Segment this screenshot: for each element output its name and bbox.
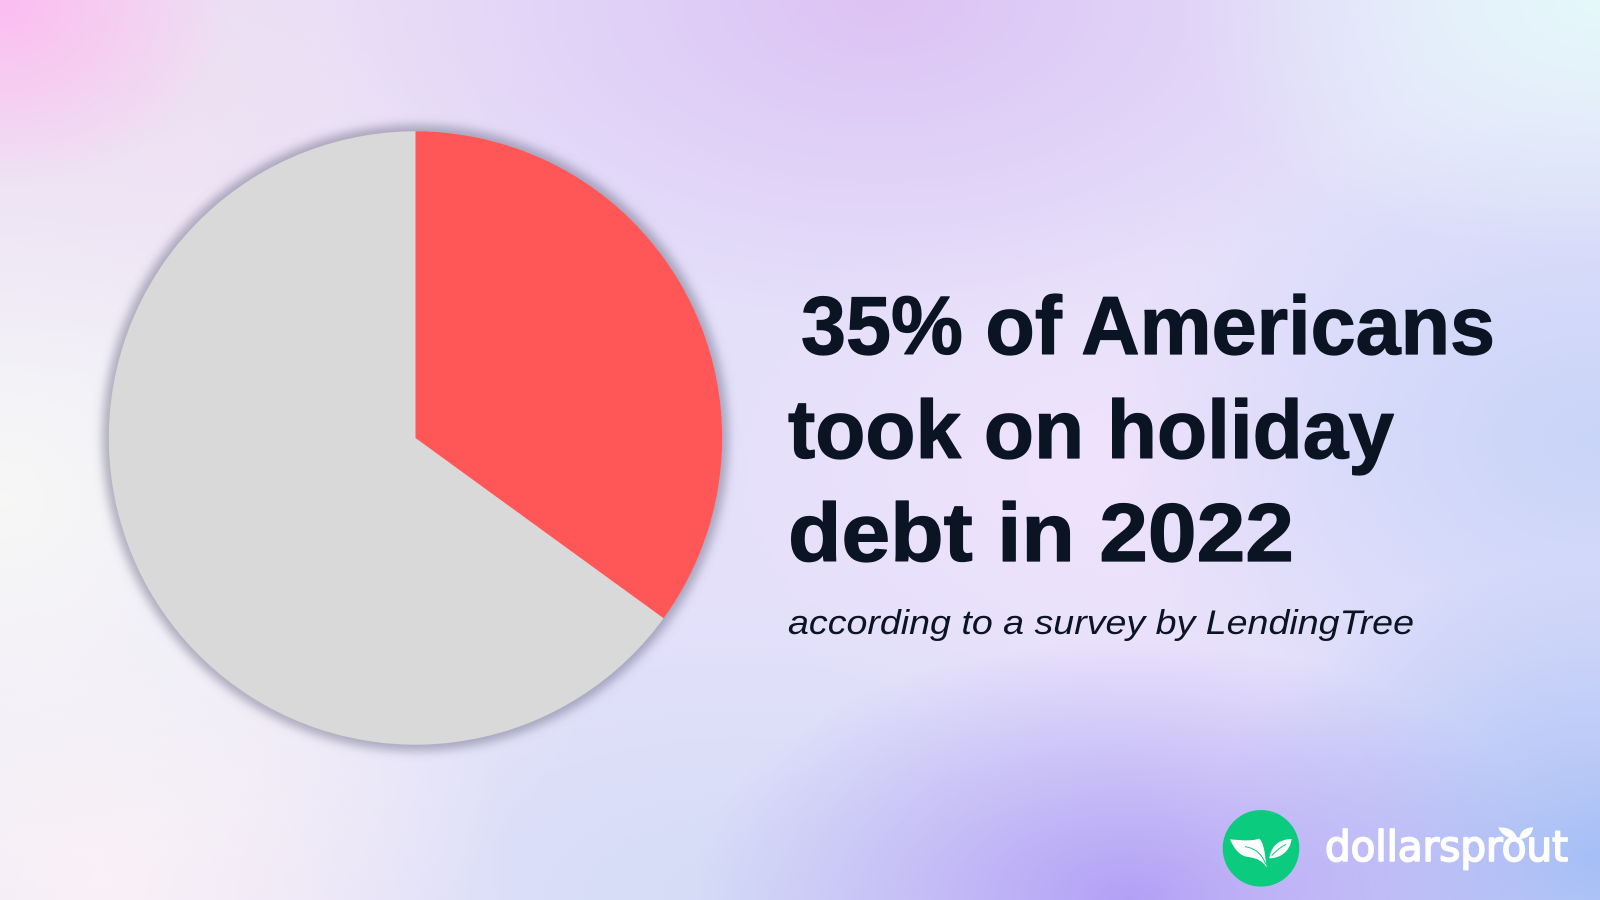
icon: green leaf circle — [1223, 810, 1299, 887]
icon: wordmark sprout leaves — [1498, 827, 1533, 839]
pie slice: 35% took on holiday debt — [416, 131, 722, 618]
pie slice: remaining 65% — [109, 131, 722, 745]
source note: according to a survey by LendingTree — [788, 604, 1414, 642]
headline line 3: debt in 2022 — [788, 486, 1294, 579]
wordmark: dollarsprout — [1325, 822, 1568, 871]
headline line 2: took on holiday — [788, 383, 1394, 476]
headline line 1: 35% of Americans — [801, 279, 1495, 372]
headline — [788, 279, 1495, 579]
pie chart: 35% holiday debt — [102, 125, 728, 751]
pie shadow — [102, 125, 728, 751]
logo: dollarsprout — [1223, 810, 1568, 887]
